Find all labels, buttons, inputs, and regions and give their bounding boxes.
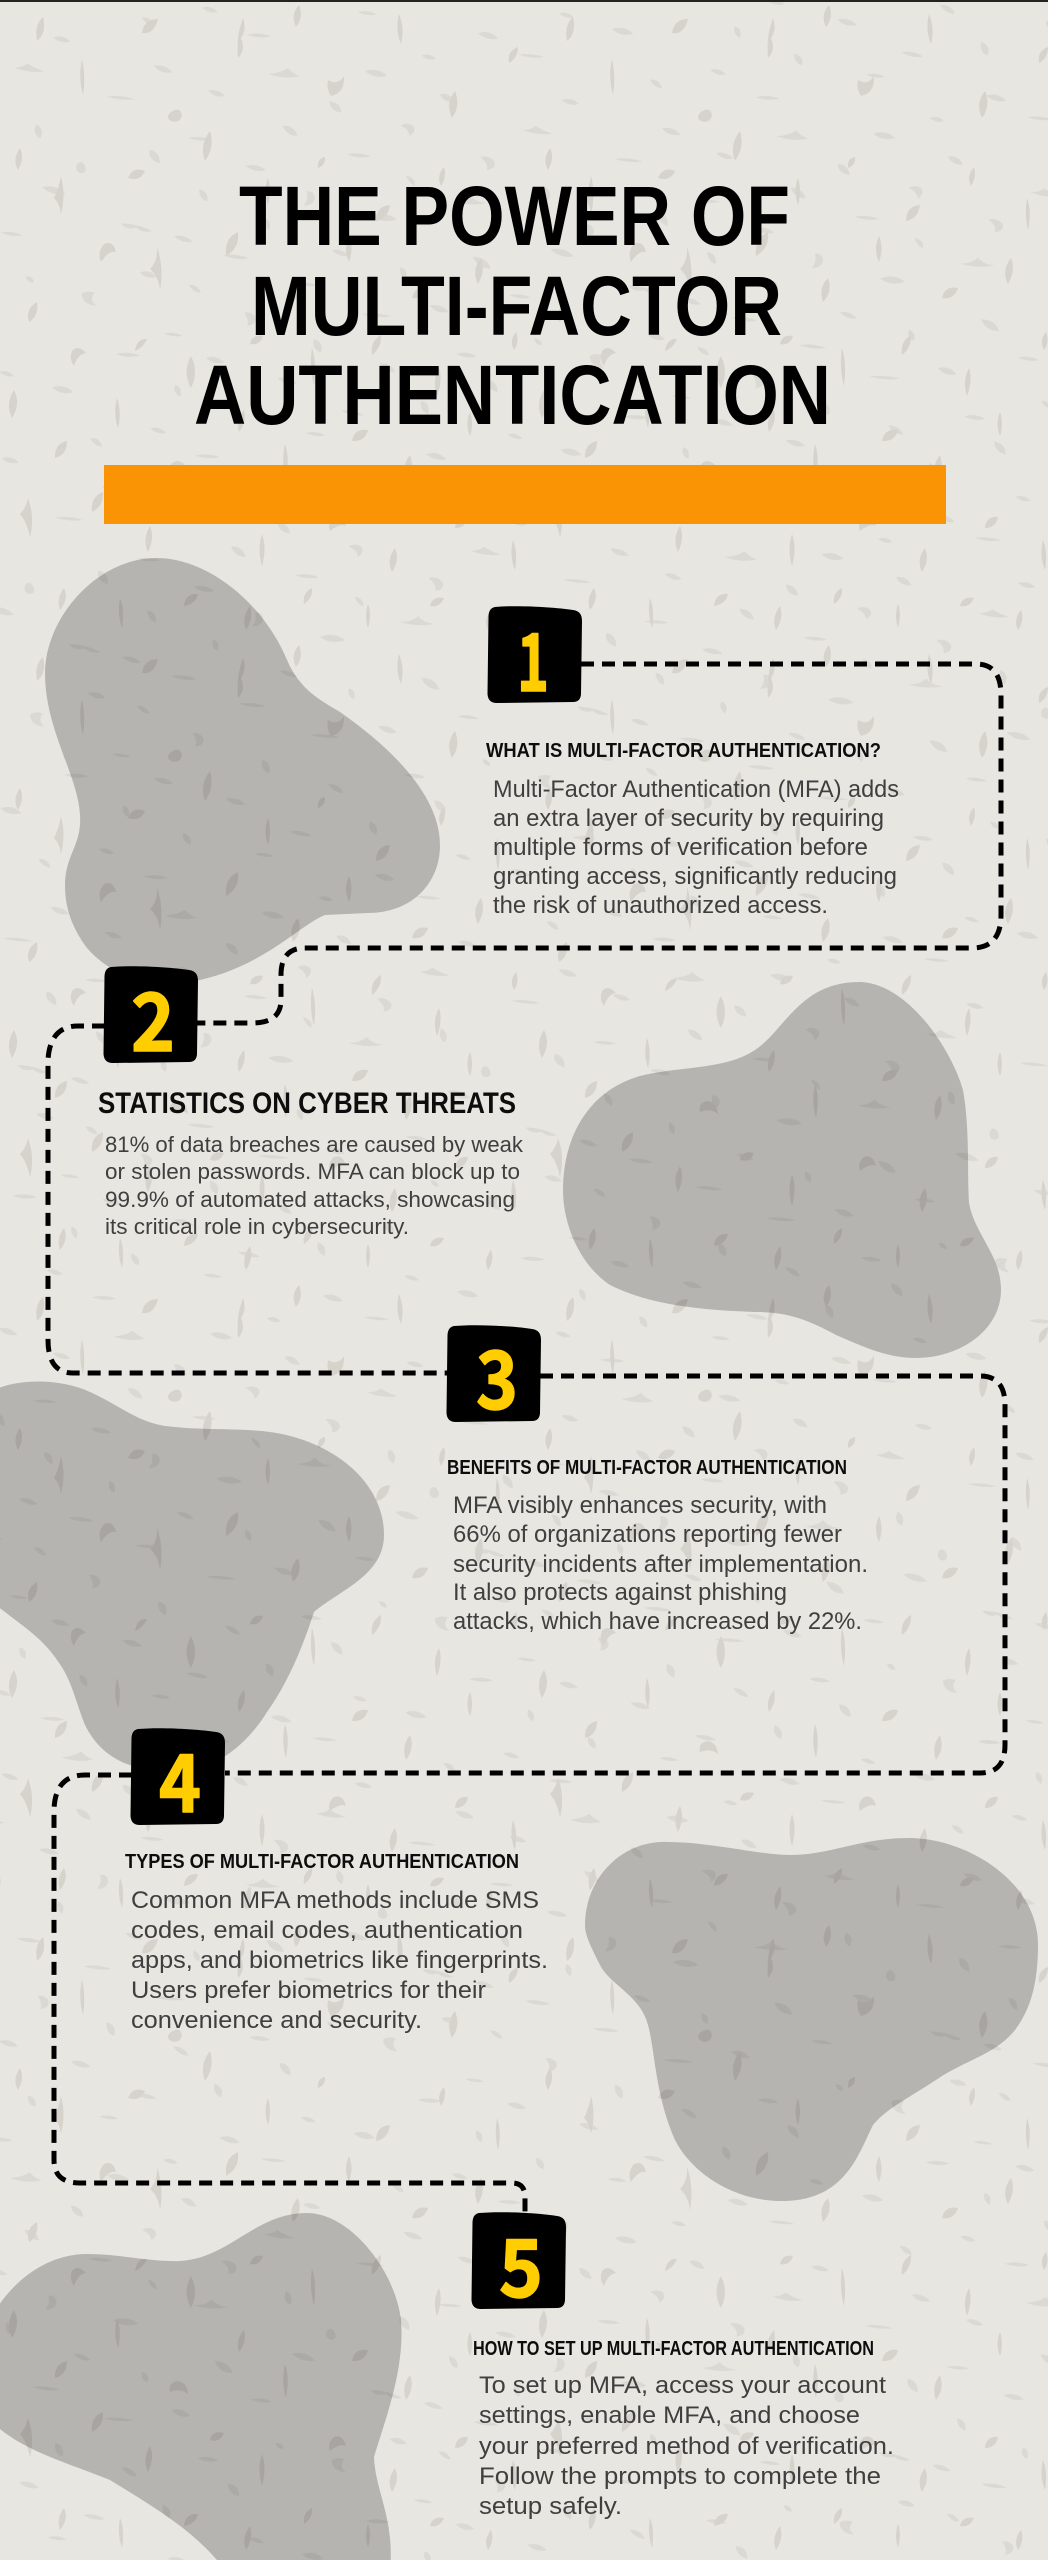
heading: what is MFA: WHAT IS MULTI-FACTOR AUTHENTICATION? <box>486 740 881 762</box>
badge 5: 5 <box>499 2205 543 2321</box>
badge 3 <box>446 1317 541 1433</box>
body text 3: 66% of organizations reporting fewer <box>453 1521 842 1548</box>
badge 4 <box>130 1720 225 1836</box>
body text 5: your preferred method of verification. <box>479 2433 894 2460</box>
panel: step 3 <box>446 1317 868 1635</box>
body text 5: setup safely. <box>479 2493 622 2520</box>
body text 5: To set up MFA, access your account <box>479 2372 886 2399</box>
heading: benefits: BENEFITS OF MULTI-FACTOR AUTHENTICATION <box>447 1457 847 1479</box>
body text 1: an extra layer of security by requiring <box>493 805 884 832</box>
badge 1: 1 <box>517 599 549 715</box>
heading: statistics: STATISTICS ON CYBER THREATS <box>98 1087 516 1120</box>
body text 4: convenience and security. <box>131 2007 422 2034</box>
badge 2: 2 <box>131 959 175 1075</box>
panel: step 1 <box>486 599 899 919</box>
title: THE POWER OF <box>239 169 790 263</box>
body text 3: It also protects against phishing <box>453 1579 787 1606</box>
panel: step 5 <box>472 2205 894 2520</box>
heading: how to set up: HOW TO SET UP MULTI-FACTOR AUTHENTICATION <box>473 2338 874 2360</box>
title: MULTI-FACTOR <box>251 259 782 353</box>
body text 1: the risk of unauthorized access. <box>493 892 828 919</box>
badge 1 <box>488 599 582 715</box>
body text 2: 81% of data breaches are caused by weak <box>105 1132 524 1157</box>
dashed connector 4 to 5 <box>54 1775 525 2212</box>
body text 1 <box>493 776 899 919</box>
body text 1: granting access, significantly reducing <box>493 863 897 890</box>
badge 5 <box>472 2205 566 2321</box>
body text 3: MFA visibly enhances security, with <box>453 1492 827 1519</box>
body text 1: Multi-Factor Authentication (MFA) adds <box>493 776 899 803</box>
body text 2: or stolen passwords. MFA can block up to <box>105 1159 520 1184</box>
dashed connector 2 to 3 <box>48 1026 448 1373</box>
badge 2 <box>104 959 198 1075</box>
orange title bar <box>104 465 946 524</box>
body text 4: apps, and biometrics like fingerprints. <box>131 1947 548 1974</box>
blob 1 <box>45 558 440 983</box>
heading: types: TYPES OF MULTI-FACTOR AUTHENTICATION <box>125 1851 519 1873</box>
blob 3 <box>0 1382 384 1772</box>
body text 4: codes, email codes, authentication <box>131 1917 523 1944</box>
body text 5: Follow the prompts to complete the <box>479 2463 881 2490</box>
body text 3 <box>453 1492 868 1635</box>
panel: step 4 <box>125 1720 548 2034</box>
dashed connector 1 to 2 <box>197 664 1001 1023</box>
body text 5 <box>479 2372 894 2520</box>
body text 4: Users prefer biometrics for their <box>131 1977 486 2004</box>
blob 5 <box>0 2213 402 2560</box>
blob 4 <box>585 1838 1038 2201</box>
badge 4: 4 <box>159 1720 201 1836</box>
blob 2 <box>563 982 1001 1358</box>
title <box>194 169 831 442</box>
body text 4: Common MFA methods include SMS <box>131 1887 539 1914</box>
badge 3: 3 <box>476 1317 518 1433</box>
body text 4 <box>131 1887 548 2034</box>
body text 1: multiple forms of verification before <box>493 834 868 861</box>
panel: step 2 <box>98 959 524 1239</box>
body text 3: security incidents after implementation. <box>453 1551 868 1578</box>
body text 5: settings, enable MFA, and choose <box>479 2402 860 2429</box>
title: AUTHENTICATION <box>194 348 831 442</box>
body text 2: its critical role in cybersecurity. <box>105 1214 409 1239</box>
body text 3: attacks, which have increased by 22%. <box>453 1608 862 1635</box>
body text 2 <box>105 1132 524 1239</box>
body text 2: 99.9% of automated attacks, showcasing <box>105 1187 515 1212</box>
dashed connector 3 to 4 <box>225 1376 1005 1773</box>
